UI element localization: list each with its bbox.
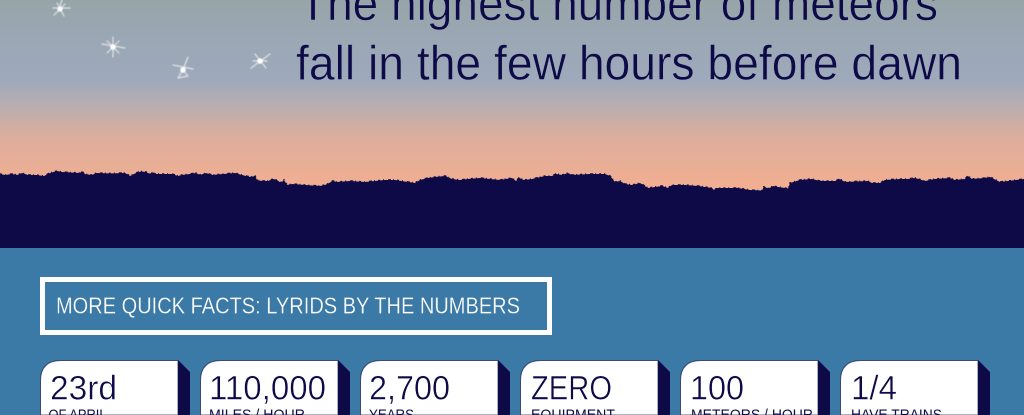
panel: quick facts background xyxy=(0,248,1024,415)
card: 110,000 miles per hour: 110,000 xyxy=(209,370,326,408)
heading: more quick facts: MORE QUICK FACTS: LYRIDS BY THE NUMBERS xyxy=(56,292,520,318)
card: 23rd of April: 23rd xyxy=(50,370,117,408)
card: 23rd of April xyxy=(40,360,190,415)
card: 100 meteors per hour: 100 xyxy=(690,370,744,408)
card: 1/4 have trains: 1/4 xyxy=(851,370,897,408)
icon: star 4 xyxy=(251,54,270,68)
icon: star 3 xyxy=(173,57,193,78)
card: zero equipment: ZERO xyxy=(531,370,612,408)
icon: star 1 xyxy=(53,0,70,16)
card: 1/4 have trains xyxy=(840,360,990,415)
card: 110,000 miles per hour xyxy=(200,360,350,415)
icon: star 2 xyxy=(102,37,125,57)
icon: star 5 cropped at top xyxy=(140,0,142,4)
card: 100 meteors per hour xyxy=(680,360,830,415)
panel: dawn sky xyxy=(0,0,1024,190)
heading: more quick facts xyxy=(42,280,550,332)
card: 2,700 years: 2,700 xyxy=(369,370,450,408)
treeline silhouette xyxy=(0,171,1024,250)
title xyxy=(296,0,962,90)
title: fall in the few hours before dawn xyxy=(296,38,962,90)
card: 2,700 years xyxy=(360,360,510,415)
card: zero equipment xyxy=(520,360,670,415)
